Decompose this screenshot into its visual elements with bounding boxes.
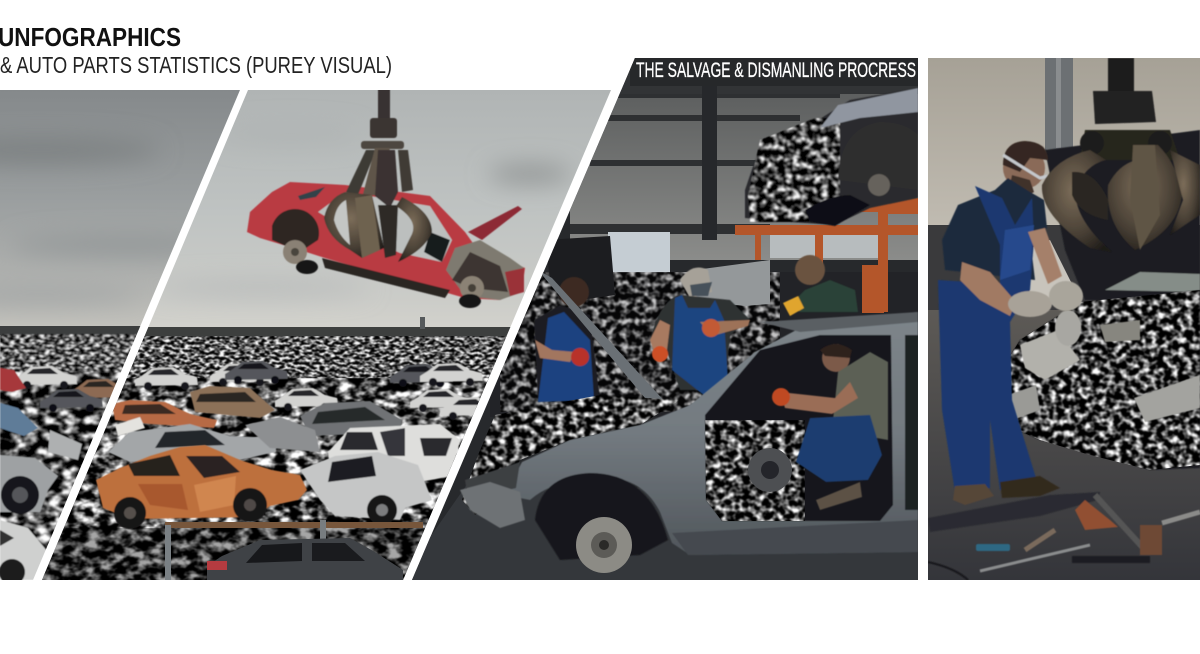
wheels xyxy=(272,209,319,252)
rust brown car xyxy=(190,386,275,418)
right claw xyxy=(396,197,432,262)
title: UNFOGRAPHICS xyxy=(0,22,181,52)
rear door pillar gap xyxy=(905,335,918,510)
wall xyxy=(928,58,1200,233)
horizon xyxy=(0,326,140,335)
left claw xyxy=(324,192,384,258)
steel column xyxy=(702,80,717,240)
grey damaged front xyxy=(446,240,524,300)
grey salvaged car xyxy=(460,312,918,560)
engine detail xyxy=(990,290,1200,475)
clouds xyxy=(206,156,571,296)
red car body xyxy=(247,182,525,300)
gloves xyxy=(1008,291,1052,317)
horizon xyxy=(140,327,520,337)
grapple xyxy=(1042,58,1200,252)
sky xyxy=(140,90,620,335)
door frame xyxy=(705,335,893,521)
steel beams xyxy=(570,94,840,234)
subtitle: & AUTO PARTS STATISTICS (PUREY VISUAL) xyxy=(0,52,392,78)
scrap engine bay xyxy=(455,395,685,520)
crane grapple and red car xyxy=(247,88,525,308)
brake disc xyxy=(576,517,632,573)
white and orange object behind xyxy=(1025,240,1075,300)
front fender dark xyxy=(465,462,520,512)
caption: THE SALVAGE & DISMANLING PROCRESS xyxy=(636,59,916,82)
roof band xyxy=(600,58,920,94)
car openings xyxy=(318,192,452,262)
panel: junkyard and cloudy sky xyxy=(0,90,250,585)
workshop windows xyxy=(608,232,670,274)
bumper xyxy=(460,482,525,528)
worker: left xyxy=(534,277,600,402)
arms xyxy=(960,262,1016,316)
roof highlight xyxy=(760,312,918,332)
parked silver car xyxy=(690,260,770,306)
sky xyxy=(0,90,245,330)
raised hood xyxy=(468,206,522,240)
orange car behind xyxy=(112,400,217,428)
machinery and parts behind workers xyxy=(500,272,780,412)
wrecked car field xyxy=(40,336,520,582)
overalls xyxy=(938,186,1036,492)
clouds xyxy=(0,136,181,307)
car on rack xyxy=(745,88,918,226)
wrecked car field xyxy=(0,333,137,580)
rocker xyxy=(322,258,450,298)
head xyxy=(1003,147,1045,189)
wrecked white car xyxy=(108,424,280,462)
tools on the floor xyxy=(928,492,1200,580)
dark car xyxy=(207,538,403,582)
orange rusted car xyxy=(96,445,307,529)
panel: grapple lifting red car above yard xyxy=(40,88,620,582)
panel: salvage and dismantling workshop xyxy=(400,58,920,580)
floor xyxy=(928,310,1200,580)
workshop wall xyxy=(570,90,920,260)
lower wall xyxy=(928,225,1200,315)
grapple xyxy=(378,88,390,120)
floor xyxy=(400,480,920,580)
hood raised xyxy=(538,270,668,410)
orange rack xyxy=(735,198,918,313)
worker: back green shirt xyxy=(783,255,858,316)
steel rack rail xyxy=(165,522,423,528)
mechanic xyxy=(938,141,1083,505)
boots xyxy=(953,484,994,505)
worker: middle xyxy=(650,268,750,396)
wheel arch xyxy=(535,473,668,560)
cabin interior engine parts xyxy=(705,344,888,522)
panel: mechanic beside grapple and engine xyxy=(928,58,1200,580)
grey pipe column xyxy=(1045,58,1073,158)
engine highlights xyxy=(1000,310,1200,424)
dark workshop base xyxy=(410,58,920,580)
car engine and body xyxy=(992,130,1200,470)
white damaged car xyxy=(300,452,432,520)
grey car behind xyxy=(300,401,402,436)
sill xyxy=(672,520,918,555)
caption bar xyxy=(630,58,918,86)
seated worker xyxy=(772,344,888,510)
torso xyxy=(942,178,1047,280)
white hatch xyxy=(328,424,460,482)
